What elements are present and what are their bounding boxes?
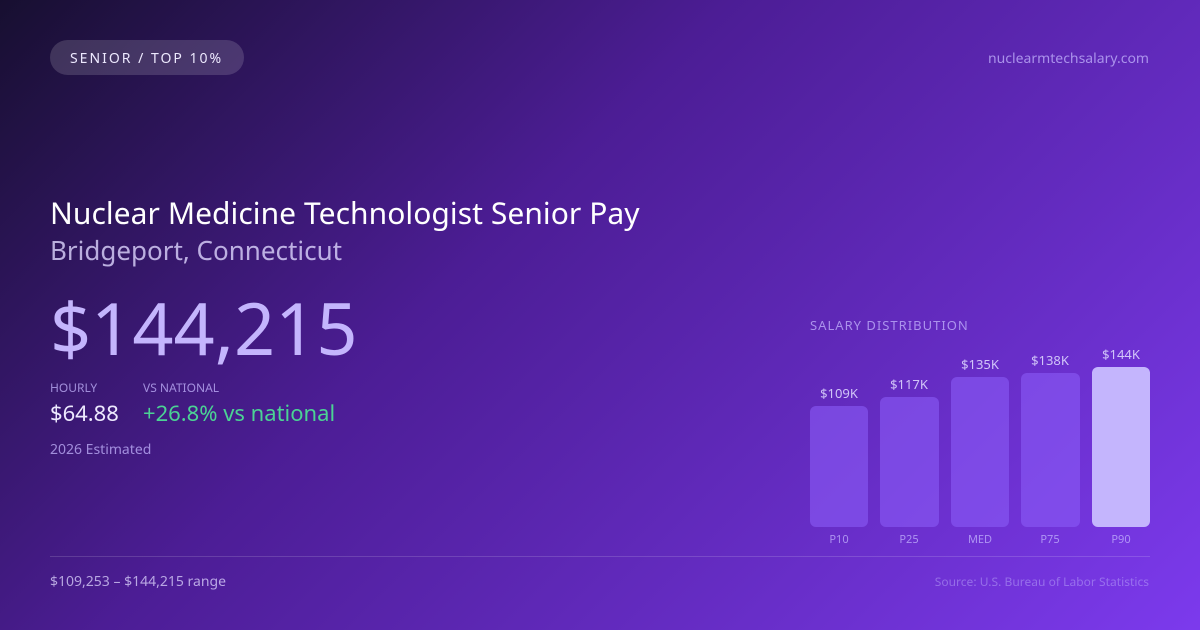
badge: senior / top 10%: SENIOR / TOP 10%	[70, 49, 223, 68]
vs national value: +26.8% vs national	[143, 398, 335, 428]
value P10: $109K	[820, 384, 858, 402]
hourly label: HOURLY	[50, 379, 97, 396]
hourly stat	[50, 379, 119, 428]
chart: salary distribution	[810, 316, 1150, 547]
label P25: P25	[899, 532, 919, 547]
hourly value: $64.88	[50, 398, 119, 428]
badge: senior / top 10%	[50, 40, 244, 75]
bar median	[951, 377, 1009, 527]
value P25: $117K	[890, 375, 928, 393]
value P75: $138K	[1031, 351, 1069, 369]
label median: MED	[968, 532, 992, 547]
headline salary: $144,215	[50, 279, 358, 377]
label P90: P90	[1111, 532, 1131, 547]
bar P10	[810, 406, 868, 527]
source: Source: U.S. Bureau of Labor Statistics	[935, 573, 1149, 590]
bar P90	[1092, 367, 1150, 527]
vs national label: VS NATIONAL	[143, 379, 219, 396]
chart heading: SALARY DISTRIBUTION	[810, 316, 969, 334]
value P90: $144K	[1102, 345, 1140, 363]
range text: $109,253 – $144,215 range	[50, 572, 226, 591]
bar P25	[880, 397, 939, 527]
site url: nuclearmtechsalary.com	[988, 49, 1149, 68]
value median: $135K	[961, 355, 999, 373]
year note: 2026 Estimated	[50, 440, 151, 459]
title: Nuclear Medicine Technologist Senior Pay	[50, 192, 640, 233]
vs national stat	[143, 379, 335, 428]
label P75: P75	[1040, 532, 1060, 547]
subtitle: location: Bridgeport, Connecticut	[50, 232, 342, 268]
label P10: P10	[829, 532, 849, 547]
bar P75	[1021, 373, 1080, 527]
